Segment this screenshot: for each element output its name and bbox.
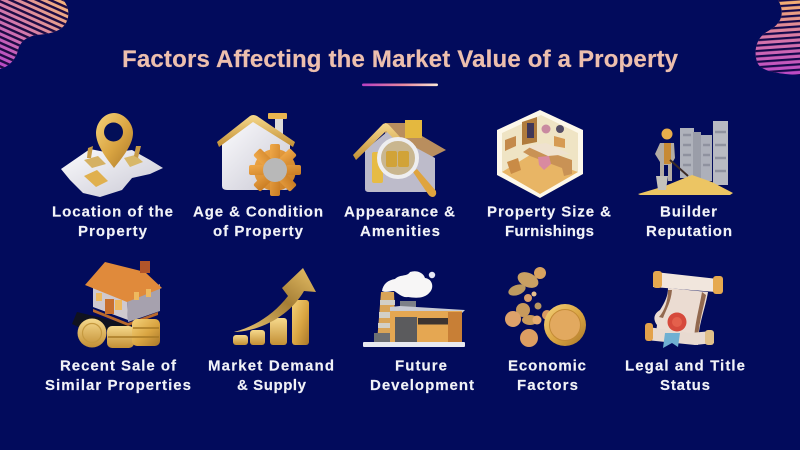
label: Future Development: Development (370, 377, 474, 394)
icon: scroll with seal (645, 271, 723, 348)
icon: isometric furnished room (497, 110, 583, 198)
label: Legal and Title Status: Status (660, 377, 710, 394)
label: Builder Reputation: Reputation (646, 223, 732, 240)
icon: falling gold coins (505, 267, 586, 347)
label: Economic Factors (508, 358, 586, 394)
factor: economic factors (505, 267, 586, 394)
label: Future Development: Future (395, 358, 447, 374)
label: Market Demand & Supply: & Supply (237, 377, 307, 394)
label: Economic Factors: Factors (517, 377, 578, 394)
decorative blob: top-left striped corner (0, 0, 68, 69)
icon: house on gold coins (72, 261, 162, 348)
icon: factory with smoke (363, 271, 465, 347)
label: Recent Sale of Similar Properties (45, 358, 191, 394)
factor: age and condition (193, 113, 323, 240)
factor: future development (363, 271, 474, 394)
icon: gold bars and rising arrow (233, 268, 316, 345)
icon: house with magnifying glass (353, 120, 446, 197)
label: Appearance & Amenities (344, 204, 455, 240)
label: Property Size & Furnishings (487, 204, 611, 240)
label: Recent Sale of Similar Properties: Recent Sale of (60, 358, 177, 374)
label: Builder Reputation: Builder (660, 204, 717, 220)
label: Recent Sale of Similar Properties: Similar Properties (45, 377, 191, 394)
label: Legal and Title Status (625, 358, 745, 394)
factor: market demand (208, 268, 334, 394)
icon: house with gear (217, 113, 301, 196)
label: Age & Condition of Property: of Property (213, 223, 304, 240)
label: Location of the Property: Location of the (52, 204, 173, 220)
label: Market Demand & Supply (208, 358, 334, 394)
label: Age & Condition of Property: Age & Condition (193, 204, 323, 220)
label: Property Size & Furnishings: Property Size & (487, 204, 611, 220)
label: Location of the Property: Property (78, 223, 148, 240)
label: Builder Reputation (646, 204, 732, 240)
label: Economic Factors: Economic (508, 358, 586, 374)
label: Age & Condition of Property (193, 204, 323, 240)
factor: recent sale (45, 261, 191, 394)
label: Market Demand & Supply: Market Demand (208, 358, 334, 374)
label: Appearance & Amenities: Amenities (360, 223, 440, 240)
label: Appearance & Amenities: Appearance & (344, 204, 455, 220)
label: Future Development (370, 358, 474, 394)
factor: legal and title (625, 271, 745, 394)
factor: property size (487, 110, 611, 240)
label: Property Size & Furnishings: Furnishings (505, 223, 594, 240)
factor: appearance (344, 120, 455, 240)
icon: map with location pin (61, 113, 163, 197)
label: Location of the Property (52, 204, 173, 240)
label: Legal and Title Status: Legal and Title (625, 358, 745, 374)
decorative blob: top-right striped corner (756, 0, 800, 75)
title: Factors Affecting the Market Value of a Property (122, 46, 679, 73)
title underline (362, 84, 438, 86)
factor: builder reputation (638, 121, 733, 240)
icon: builder and towers (638, 121, 733, 195)
factor: location (52, 113, 173, 240)
